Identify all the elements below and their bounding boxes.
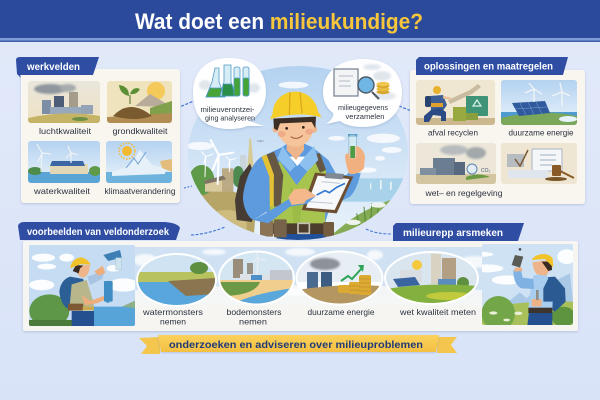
icon: document, magnifier and coins [334,69,390,99]
shirt [528,273,553,310]
image: klimaatverandering [106,141,172,183]
head [76,264,90,278]
dashed connector: circle to klimaat [184,186,192,188]
caption: wet– en regelgeving [424,188,503,198]
raised arm [513,268,534,289]
image: afval recyclen [416,80,495,125]
wind turbines [202,140,236,184]
central illustration: landscape circle [187,66,410,242]
caption: grondkwaliteit [112,126,168,136]
head [532,260,550,276]
trousers [72,311,94,327]
backpack [235,164,252,222]
dashed connector: circle to milieu [366,229,391,234]
bubble text: ging analyseren [205,114,255,122]
heading: milieurepp arsmeken: milieurepp arsmeken [403,228,503,239]
ribbon: onderzoeken en adviseren over milieuproblemen: onderzoeken en adviseren over milieuproblemen [169,339,423,351]
central figure: environmental scientist [235,92,365,242]
collar and tee [277,146,318,172]
image: grondkwaliteit [107,81,172,123]
image: wet- en regelgeving factory [416,143,496,184]
ground [200,192,256,233]
bubble text: milieuverontzei- [200,105,255,114]
shirt [69,280,94,309]
icon: lab glassware [206,65,249,97]
ears and face [273,126,277,133]
caption: nemen [239,316,267,326]
image: luchtkwaliteit [28,81,100,123]
vignette: river bank [136,253,217,307]
trousers [276,234,327,240]
heading: werkvelden: werkvelden [26,62,80,73]
bubble text: milieugegevens [338,103,388,112]
image: waterkwaliteit [28,141,101,183]
caption: waterkwaliteit [33,186,91,196]
eyes, cheeks and smile [285,127,288,130]
ribbon: onderzoeken en adviseren over milieuproblemen [139,335,457,354]
panel: werkvelden [21,69,180,203]
backpack straps [262,152,283,207]
speech bubble: milieugegevens verzamelen [323,59,402,127]
backpack [542,277,566,312]
vest [269,162,326,224]
hard hat [270,92,322,119]
caption: afval recyclen [428,128,478,138]
image: wet- en regelgeving factory: CO₂ [481,168,490,174]
photo: scientist taking water sample [29,244,138,328]
caption: duurzame energie [308,307,375,317]
dashed connector: bubble to oplossingen [399,106,419,114]
dashed connector: bubble to werkvelden [177,101,194,108]
caption: luchtkwaliteit [39,126,92,136]
raised arm and sampler [87,273,104,285]
header banner [0,0,600,42]
writing hand and forearm [253,188,316,223]
trousers [527,312,552,326]
speech bubble: milieuverontreiniging analyseren [193,58,266,129]
heading: oplossingen en maatregelen: oplossingen en maatregelen [424,62,553,72]
house [205,180,225,192]
vignette: industrial site [218,250,295,306]
heading: milieurepp arsmeken [393,223,524,241]
vignette: energy and coins [296,250,384,306]
shirt body and arms [243,144,361,223]
vignette: solar field [384,251,479,305]
caption: wet kwaliteit meten [399,307,476,317]
dashed connector: circle to voorbeelden [191,227,225,235]
caption: nemen [160,316,186,326]
skyline [240,138,254,170]
heading: oplossingen en maatregelen [416,57,568,75]
caption: bodemonsters [226,307,282,317]
test tube and hand [348,136,357,154]
title: Wat doet een milieukundige? [135,9,423,34]
panel: oplossingen en maatregelen [410,70,585,204]
belt and pouches [273,223,324,234]
caption: klimaatverandering [104,186,176,196]
heading: voorbeelden van veldonderzoek: voorbeelden van veldonderzoek [27,227,169,238]
neck [286,144,304,160]
heading: werkvelden [16,57,99,78]
caption: duurzame energie [508,128,574,138]
panel: bottom fieldwork strip [23,241,578,331]
caption: watermonsters [142,307,203,317]
heading: voorbeelden van veldonderzoek [18,222,180,240]
image: duurzame energie [501,80,577,125]
hair [273,117,316,131]
backpack [59,277,87,309]
image: gavel and checklist [501,143,577,184]
photo: scientist measuring on a field [482,244,573,325]
bubble text: verzamelen [346,112,384,121]
clipboard with chart [302,173,353,213]
device [512,255,523,268]
lower arm and sampler [82,295,104,305]
